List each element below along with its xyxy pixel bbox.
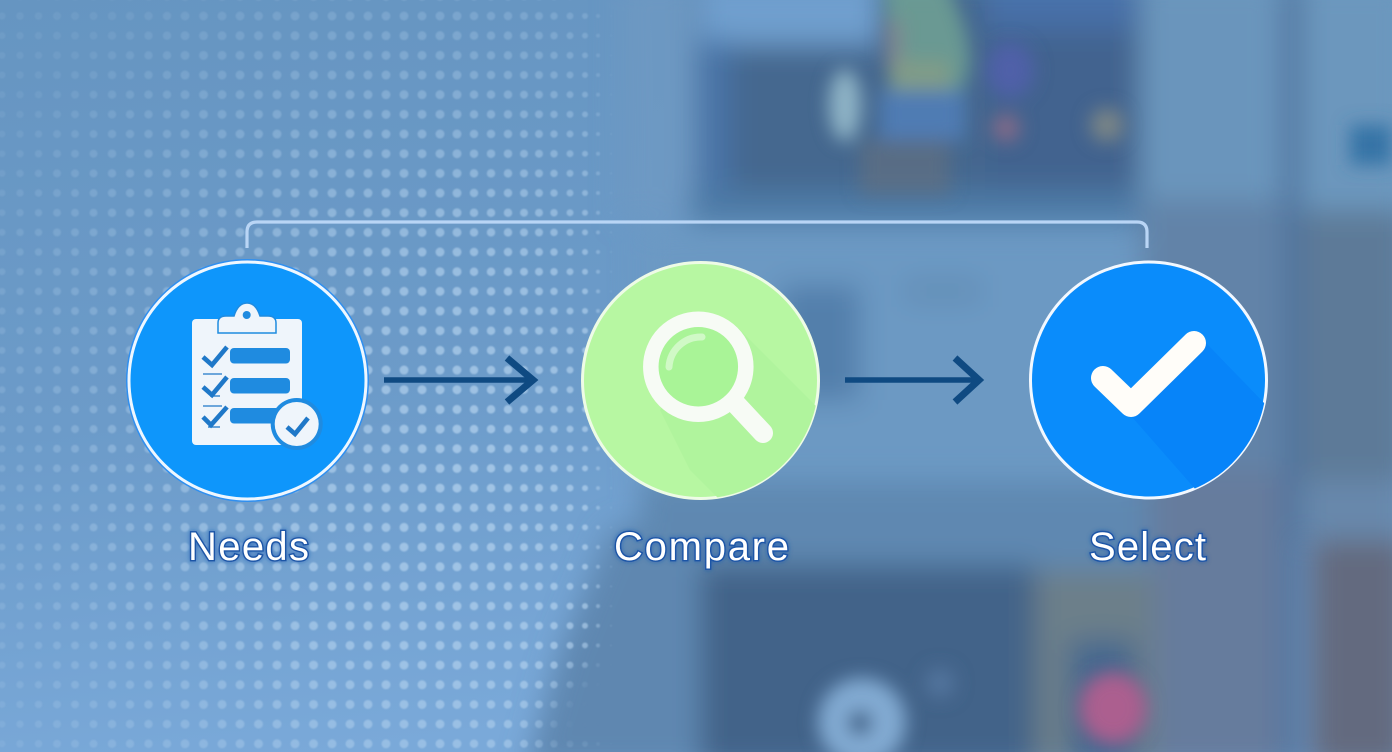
step 3: Select	[1029, 260, 1268, 564]
icon: green circle with magnifying glass	[581, 261, 820, 500]
icon: blue circle with clipboard	[127, 260, 368, 501]
icon: blue circle with check mark	[1029, 260, 1268, 500]
step 1: Needs	[127, 260, 368, 569]
step 2: Compare	[581, 261, 820, 572]
label: Compare: Compare	[614, 525, 789, 569]
connector bracket linking Needs to Select	[247, 222, 1147, 248]
arrow: Compare to Select	[845, 358, 979, 402]
halftone dot field	[2, 0, 611, 752]
arrow: Needs to Compare	[384, 358, 533, 402]
label: Select: Select	[1089, 525, 1206, 569]
label: Needs: Needs	[188, 525, 309, 569]
